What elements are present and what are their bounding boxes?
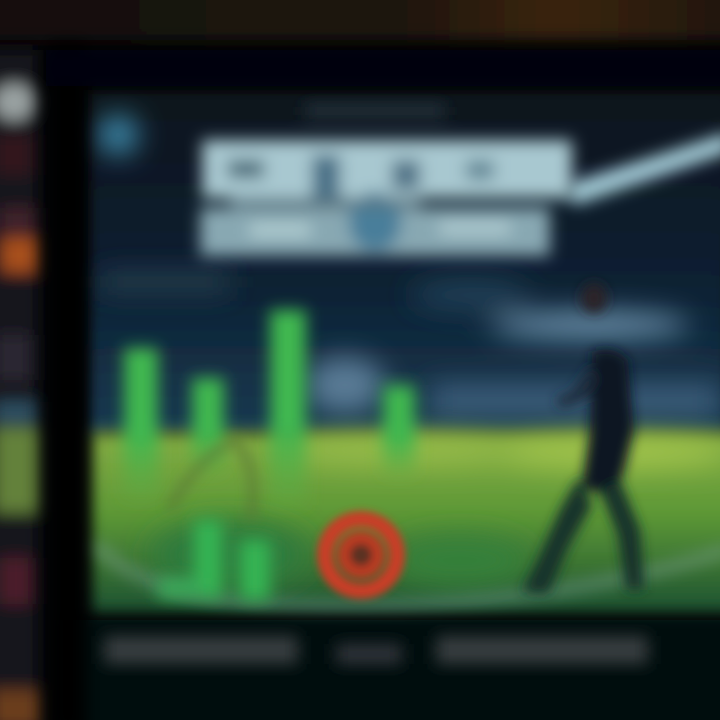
icon: red target circle — [325, 519, 397, 591]
left neighbouring panel — [0, 50, 40, 720]
pitch curve lines — [95, 545, 720, 607]
bottom black band — [60, 620, 720, 720]
bar chart: green bars — [124, 310, 415, 600]
footballer silhouette — [522, 283, 644, 594]
light beam — [565, 132, 720, 205]
pitch — [90, 432, 720, 614]
left black frame — [50, 44, 86, 720]
main panel: stadium background — [88, 90, 720, 614]
stadium lights and stands — [98, 115, 720, 417]
top wooden band — [0, 0, 720, 40]
trend line on chart — [170, 440, 253, 520]
title block — [200, 105, 572, 256]
top black frame — [46, 50, 720, 86]
caption blocks — [104, 636, 648, 664]
